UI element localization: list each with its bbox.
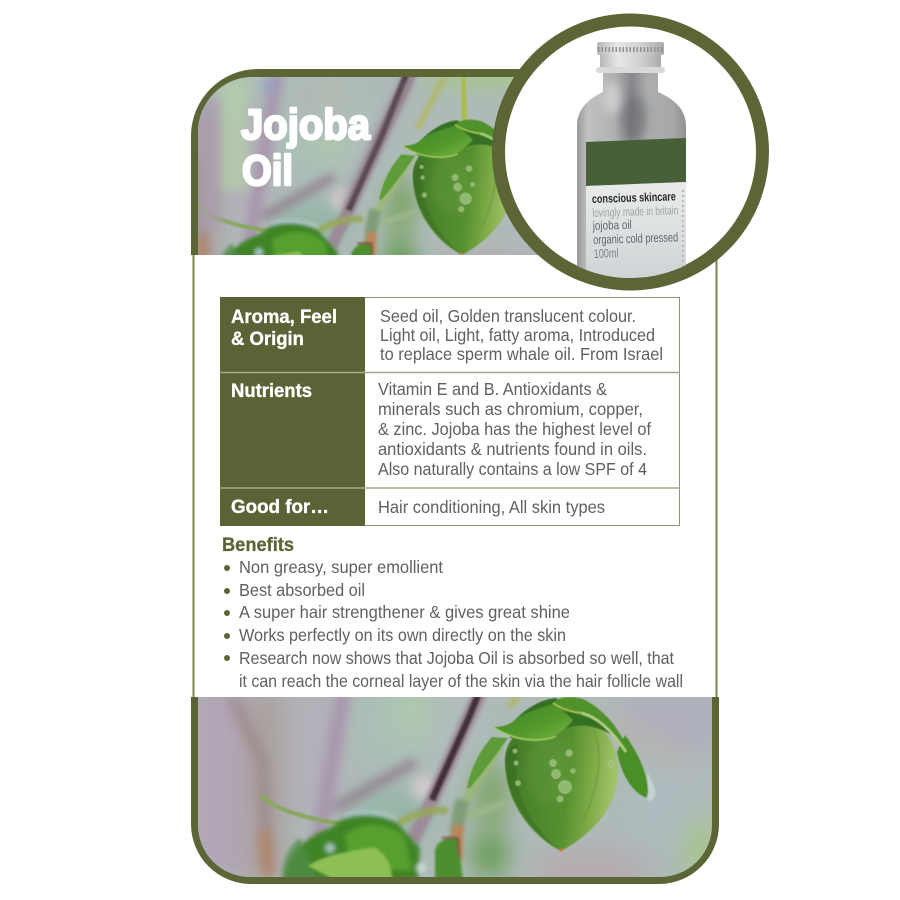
row: aroma, feel and origin: Light oil, Light, fatty aroma, Introduced (380, 325, 655, 345)
row: nutrients: Nutrients (231, 381, 312, 402)
top frame (191, 69, 538, 255)
title: Jojoba (241, 101, 371, 149)
row: good for (231, 497, 605, 518)
bottle label text: 100ml (593, 246, 619, 261)
bottom photo: jojoba bud (198, 697, 712, 877)
bottom frame (191, 697, 719, 884)
benefits list: Best absorbed oil (239, 580, 365, 600)
bottle label text: jojoba oil (592, 218, 632, 233)
row: aroma, feel and origin: & Origin (231, 329, 304, 350)
white content panel (193, 230, 717, 698)
title: Oil (242, 147, 293, 195)
row: nutrients: Vitamin E and B. Antioxidants & (378, 379, 607, 399)
bottle label text (592, 192, 678, 258)
row: nutrients: antioxidants & nutrients found in oils. (378, 439, 647, 459)
benefits list: Research now shows that Jojoba Oil is absorbed so well, that (239, 648, 674, 668)
top photo: jojoba bud (198, 77, 538, 255)
row: nutrients (231, 379, 651, 479)
title (241, 101, 371, 195)
properties table (220, 297, 680, 526)
row: aroma, feel and origin (231, 306, 663, 364)
benefits list: it can reach the corneal layer of the skin via the hair follicle wall (239, 671, 683, 691)
bottle (577, 42, 686, 290)
benefits list: A super hair strengthener & gives great shine (239, 602, 570, 622)
row: nutrients: minerals such as chromium, copper, (378, 399, 643, 419)
row: good for: Good for… (231, 497, 329, 518)
row: aroma, feel and origin: Seed oil, Golden translucent colour. (380, 306, 636, 326)
bottle label text: lovingly made in britain (592, 203, 678, 220)
benefits list: Works perfectly on its own directly on the skin (239, 625, 566, 645)
row: good for: Hair conditioning, All skin types (378, 497, 605, 517)
benefits list (224, 557, 683, 691)
bottle label text: conscious skincare (592, 189, 676, 206)
benefits heading: Benefits (222, 535, 294, 556)
row: nutrients: & zinc. Jojoba has the highest level of (378, 419, 651, 439)
bottle label text: organic cold pressed (593, 230, 678, 247)
row: aroma, feel and origin: to replace sperm whale oil. From Israel (380, 344, 663, 364)
row: nutrients: Also naturally contains a low SPF of 4 (378, 459, 647, 479)
row: aroma, feel and origin: Aroma, Feel (231, 307, 337, 328)
benefits list: Non greasy, super emollient (239, 557, 443, 577)
product circle with bottle (498, 20, 762, 290)
